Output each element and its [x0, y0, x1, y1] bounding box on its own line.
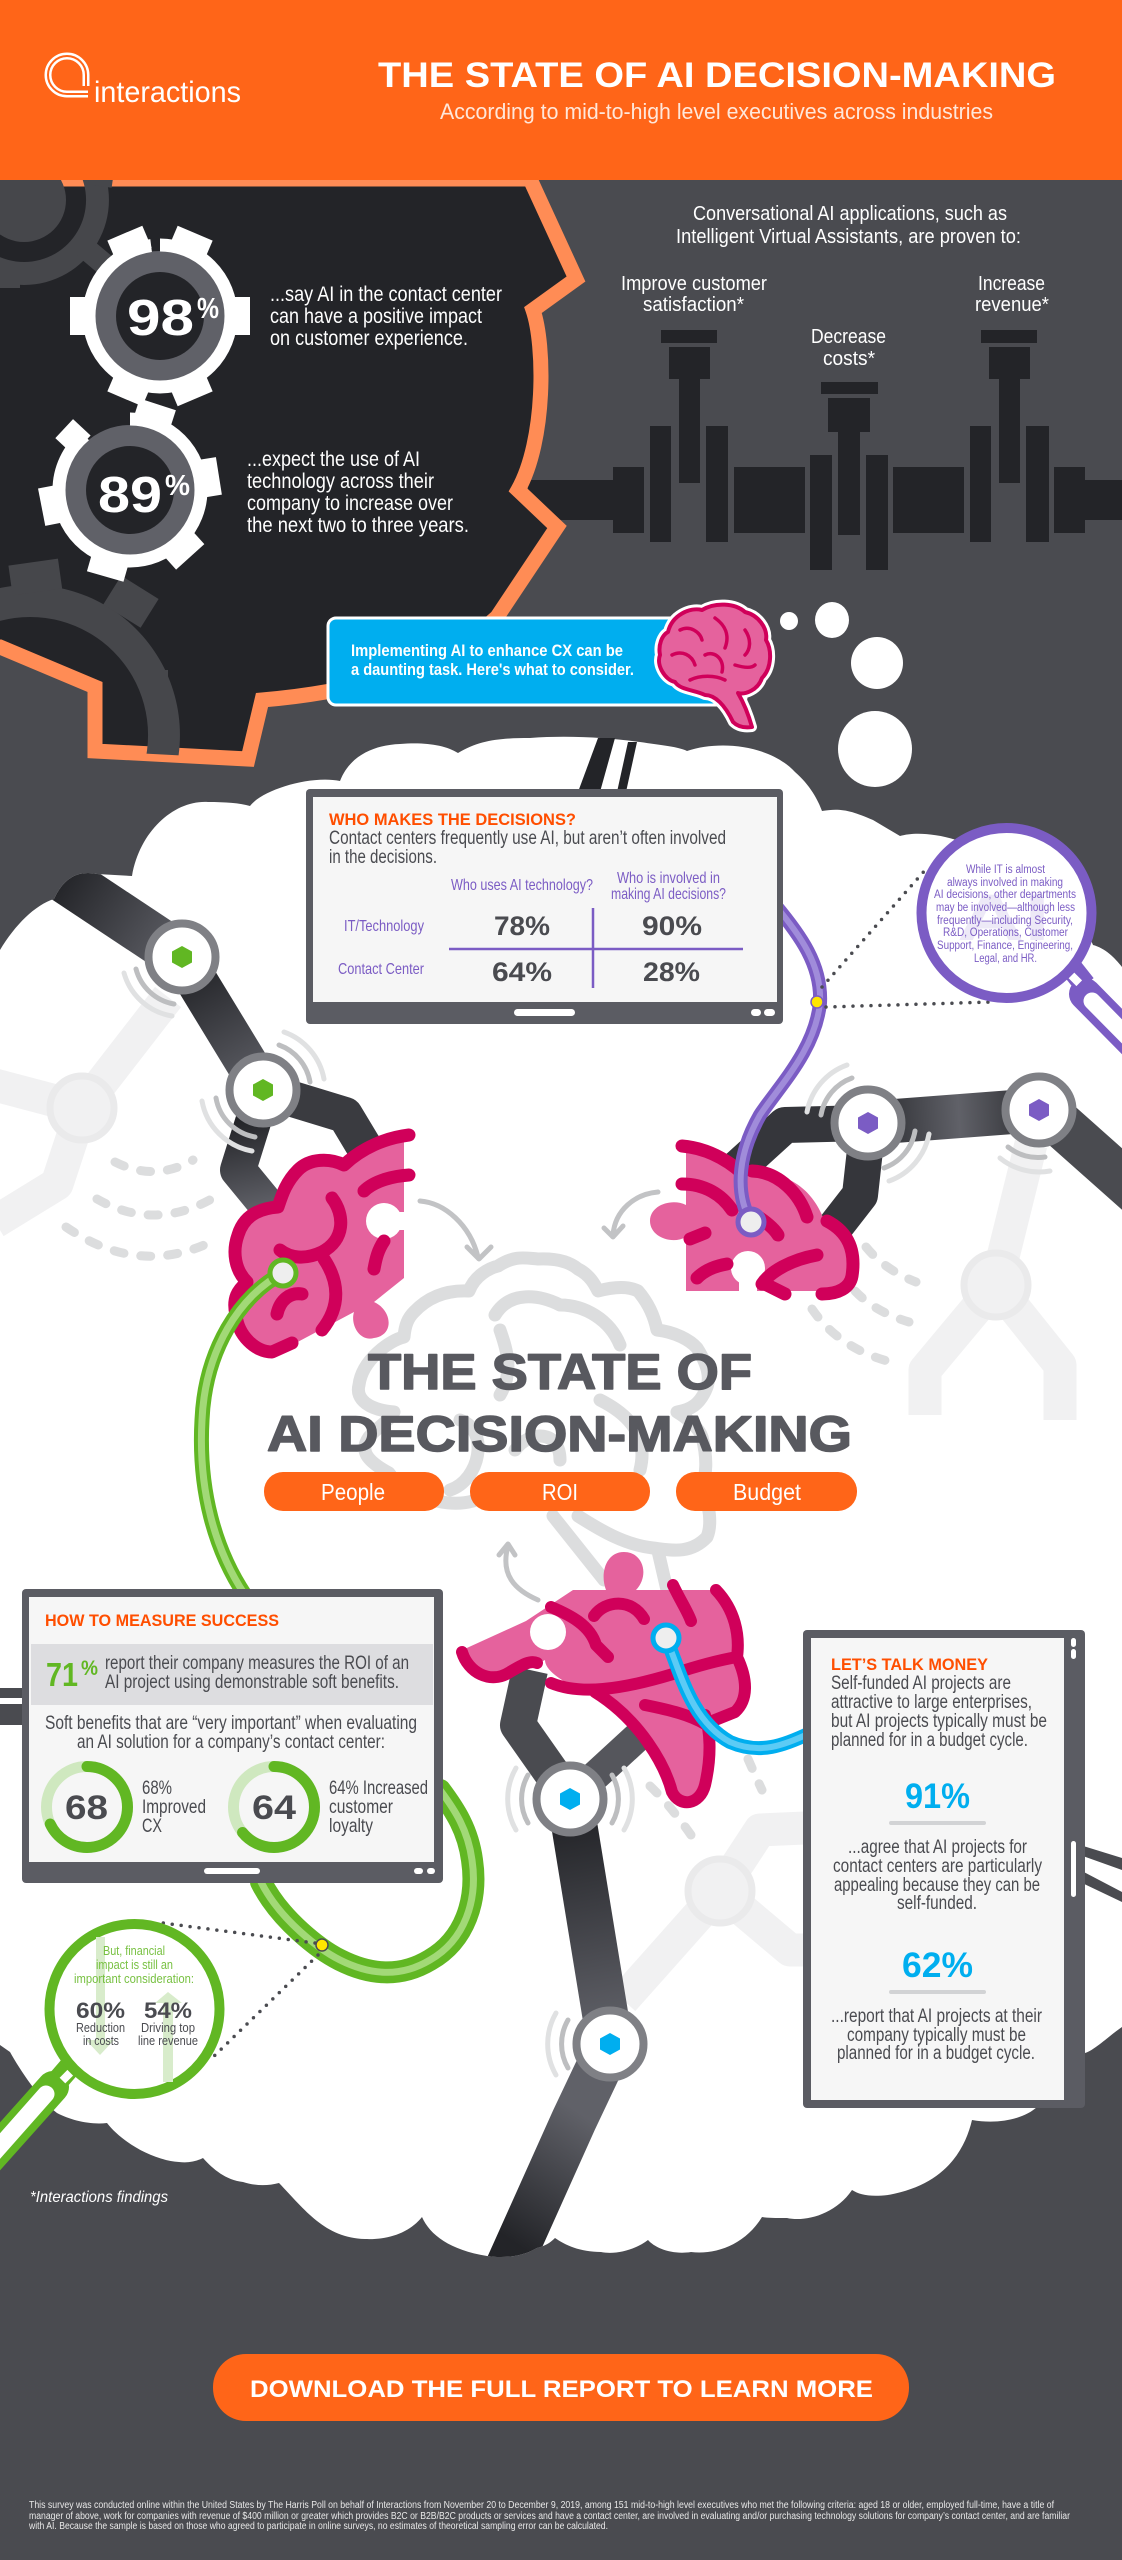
gear stat: 98%: 98: [127, 289, 194, 346]
donut label: customer loyalty: [329, 1778, 428, 1837]
connector tube: blue: [653, 1625, 810, 1748]
text: money intro: [831, 1673, 1047, 1751]
text: 91% description: [833, 1837, 1042, 1914]
white cloud: [0, 737, 1122, 2257]
robot arm stripes behind panels: [0, 738, 1122, 1902]
text: 91% description: self-funded.: [897, 1893, 977, 1914]
text: 62% description: planned for in a budget cycle.: [837, 2043, 1035, 2064]
call to action button: [213, 2354, 909, 2421]
dark gear panel with orange outline: [0, 179, 576, 759]
text: financial impact intro: important consideration:: [74, 1971, 194, 1986]
text: financial impact intro: But, financial: [103, 1943, 165, 1958]
stat: 54% driving top line revenue: Driving top: [141, 2020, 195, 2035]
donut label: improved CX: 68%: [142, 1778, 172, 1799]
text: 98% description: can have a positive impact: [270, 305, 482, 328]
text: purple callout: R&D, Operations, Customer: [943, 927, 1068, 939]
label: improve customer satisfaction: Improve customer: [621, 273, 767, 295]
motion arcs near joints: [124, 969, 1050, 2075]
joints: purple: [834, 1076, 1072, 1156]
text: purple callout: [934, 864, 1076, 965]
text: money intro: attractive to large enterprises,: [831, 1692, 1032, 1713]
text: money intro: but AI projects typically must be: [831, 1711, 1047, 1732]
donut chart: 64: [234, 1766, 314, 1848]
puzzle brain: right piece: [650, 1146, 856, 1294]
pill: People: [264, 1472, 444, 1511]
heading: let's talk money: LET’S TALK MONEY: [831, 1655, 989, 1674]
stat: 71%: %: [81, 1657, 98, 1680]
footnote: interactions findings: *Interactions findings: [30, 2189, 168, 2206]
gear stat: 89%: %: [165, 470, 190, 502]
pill: ROI: ROI: [542, 1479, 578, 1505]
stat: 62%: 62%: [902, 1946, 973, 1985]
icon: faint down arrow: [86, 1937, 114, 2055]
pipes illustration: [528, 330, 1122, 570]
pill: Budget: Budget: [733, 1479, 802, 1505]
text: conversational AI intro: Conversational AI applications, such as: [693, 203, 1007, 225]
text: conversational AI intro: [676, 203, 1021, 248]
stat: 91%: 91%: [905, 1777, 970, 1816]
faint joints: [50, 1076, 1028, 1923]
table: column headers: [451, 870, 726, 903]
label: increase revenue: [975, 273, 1049, 316]
joints: green: [148, 924, 296, 1124]
arrow: rotate to center, bottom: [499, 1544, 538, 1600]
table: column headers: making AI decisions?: [611, 886, 726, 903]
text: financial impact intro: impact is still an: [96, 1957, 173, 1972]
robot arm: left: [60, 876, 372, 1215]
arrow: rotate to center, left: [420, 1201, 491, 1259]
text: 98% description: ...say AI in the contact center: [270, 283, 502, 306]
icon: thinking brain: [659, 605, 770, 727]
joints: blue: [536, 1766, 644, 2078]
heading: who makes the decisions: WHO MAKES THE DECISIONS?: [329, 810, 576, 829]
pill: Budget: [676, 1472, 857, 1511]
label: decrease costs: [811, 326, 886, 370]
text: purple callout: Support, Finance, Engineering,: [937, 940, 1073, 952]
heading: how to measure success: HOW TO MEASURE SUCCESS: [45, 1611, 279, 1630]
center title: THE STATE OF: [368, 1344, 752, 1400]
header band: [0, 0, 1122, 180]
table: values: [492, 911, 702, 987]
call to action button: DOWNLOAD THE FULL REPORT TO LEARN MORE: [250, 2376, 873, 2403]
panel: who makes the decisions: [306, 789, 783, 1024]
text: 89% description: [247, 448, 469, 537]
text: soft benefits intro: an AI solution for a company’s contact center:: [77, 1732, 385, 1753]
stat: 60% reduction in costs: in costs: [83, 2033, 119, 2048]
callout: blue banner: [328, 618, 746, 705]
text: 62% description: ...report that AI projects at their: [831, 2006, 1043, 2027]
donut label: customer loyalty: 64% Increased: [329, 1778, 428, 1799]
text: money intro: planned for in a budget cycle.: [831, 1730, 1028, 1751]
text: purple callout: Legal, and HR.: [974, 953, 1037, 965]
text: 91% description: ...agree that AI projects for: [848, 1837, 1028, 1858]
table: column headers: Who uses AI technology?: [451, 877, 593, 894]
robot arm: bottom: [500, 1670, 645, 2285]
table: column headers: Who is involved in: [617, 870, 720, 887]
donut label: improved CX: CX: [142, 1816, 162, 1837]
label: increase revenue: Increase: [978, 273, 1045, 295]
table: values: 90%: [642, 911, 702, 941]
donut chart: 68: 68: [65, 1789, 108, 1827]
stat: 60% reduction in costs: 60%: [76, 1998, 125, 2023]
center title: AI DECISION-MAKING: [267, 1406, 852, 1462]
faint dashed motion arcs: [66, 1160, 916, 1835]
donut label: improved CX: [142, 1778, 206, 1837]
callout: blue banner: a daunting task. Here's what to consider.: [351, 660, 634, 679]
label: improve customer satisfaction: satisfaction*: [643, 294, 744, 316]
stat: 60% reduction in costs: [76, 1998, 125, 2048]
donut label: customer loyalty: customer: [329, 1797, 394, 1818]
text: purple callout: AI decisions, other departments: [934, 889, 1076, 901]
table: row headers: [338, 918, 425, 978]
text: conversational AI intro: Intelligent Virtual Assistants, are proven to:: [676, 226, 1021, 248]
gear: top left decorative: [0, 115, 117, 288]
text: 71% description: AI project using demonstrable soft benefits.: [105, 1672, 399, 1693]
text: 89% description: technology across their: [247, 470, 434, 493]
yellow dot: purple tube: [811, 996, 823, 1008]
magnifier callout: green: [0, 1924, 220, 2180]
table: row headers: Contact Center: [338, 961, 425, 978]
text: panel intro: Contact centers frequently use AI, but aren’t often involved: [329, 828, 726, 849]
text: purple callout: While IT is almost: [966, 864, 1046, 876]
text: 62% description: company typically must be: [847, 2025, 1026, 2046]
text: 98% description: [270, 283, 502, 350]
table: grid lines: [449, 908, 743, 988]
text: panel intro: in the decisions.: [329, 847, 437, 868]
gear stat: 98%: %: [197, 293, 219, 325]
footer: survey methodology: [28, 2500, 1071, 2532]
dotted leaders: green magnifier: [163, 1923, 318, 2060]
icon: faint up arrow: [155, 1992, 182, 2082]
gear stat: 98%: [70, 226, 250, 406]
stat: 60% reduction in costs: Reduction: [76, 2020, 125, 2035]
connector tube: green: [201, 1260, 473, 1972]
label: improve customer satisfaction: [621, 273, 767, 316]
logo: interactions: interactions: [94, 76, 241, 109]
stat: 54% driving top line revenue: [138, 1998, 198, 2048]
logo: interactions: [48, 56, 241, 109]
text: 71% description: [105, 1653, 409, 1693]
gear stat: 89%: [38, 399, 222, 582]
text: 89% description: the next two to three years.: [247, 514, 469, 537]
pill: ROI: [470, 1472, 650, 1511]
text: 62% description: [831, 2006, 1043, 2064]
magnifier callout: purple: [922, 828, 1122, 1070]
donut chart: 64: 64: [252, 1789, 296, 1827]
text: 98% description: on customer experience.: [270, 327, 468, 350]
magnifier callout: purple: AI: [957, 880, 1050, 954]
connector tube: purple: [738, 905, 820, 1235]
panel: how to measure success: [22, 1589, 443, 1883]
stat: 54% driving top line revenue: 54%: [144, 1998, 192, 2023]
stat: 54% driving top line revenue: line revenue: [138, 2033, 198, 2048]
label: decrease costs: Decrease: [811, 326, 886, 348]
faint background robot arms: [0, 997, 1060, 2000]
title: THE STATE OF AI DECISION-MAKING: [378, 56, 1056, 95]
text: soft benefits intro: [45, 1713, 417, 1753]
puzzle brain: left piece: [235, 1135, 409, 1352]
text: 89% description: ...expect the use of AI: [247, 448, 420, 471]
table: values: 28%: [643, 957, 700, 987]
text: 91% description: contact centers are particularly: [833, 1856, 1042, 1877]
text: money intro: Self-funded AI projects are: [831, 1673, 1011, 1694]
text: purple callout: frequently—including Security,: [937, 915, 1073, 927]
dotted leaders: purple magnifier: [822, 868, 992, 1007]
pill: People: People: [321, 1479, 385, 1505]
robot arm: right: [730, 1110, 1122, 1240]
text: panel intro: [329, 828, 726, 868]
thought bubbles: [780, 602, 912, 787]
text: purple callout: always involved in making: [947, 877, 1063, 889]
stat: 71%: 71: [46, 1656, 78, 1693]
subtitle: According to mid-to-high level executives across industries: [440, 99, 993, 124]
gear: bottom left decorative: [0, 558, 180, 756]
text: soft benefits intro: Soft benefits that are “very important” when evaluating: [45, 1713, 417, 1734]
text: 71% description: report their company measures the ROI of an: [105, 1653, 409, 1674]
panel: let's talk money: [803, 1630, 1085, 2108]
gear stat: 89%: 89: [98, 466, 162, 523]
table: row headers: IT/Technology: [344, 918, 424, 935]
arrow: rotate to center, right: [604, 1192, 658, 1237]
table: values: 64%: [492, 957, 552, 987]
text: 89% description: company to increase over: [247, 492, 453, 515]
donut label: customer loyalty: loyalty: [329, 1816, 373, 1837]
puzzle brain: bottom piece: [458, 1552, 746, 1804]
text: 91% description: appealing because they can be: [834, 1875, 1040, 1896]
footer: survey methodology: with AI. Because the sample is based on those who agreed to participate in online surveys, no estimates of theoretical sampling error can be calculated.: [28, 2521, 608, 2532]
table: values: 78%: [494, 911, 550, 941]
donut label: improved CX: Improved: [142, 1797, 206, 1818]
label: decrease costs: costs*: [823, 348, 875, 370]
center title: [267, 1344, 852, 1462]
text: financial impact intro: [74, 1943, 194, 1986]
faint brain outline: [358, 1258, 710, 1590]
callout: blue banner: Implementing AI to enhance CX can be: [351, 641, 623, 660]
label: increase revenue: revenue*: [975, 294, 1049, 316]
yellow dot: green tube: [316, 1939, 328, 1951]
text: purple callout: may be involved—although less: [936, 902, 1075, 914]
donut chart: 68: [46, 1766, 128, 1848]
